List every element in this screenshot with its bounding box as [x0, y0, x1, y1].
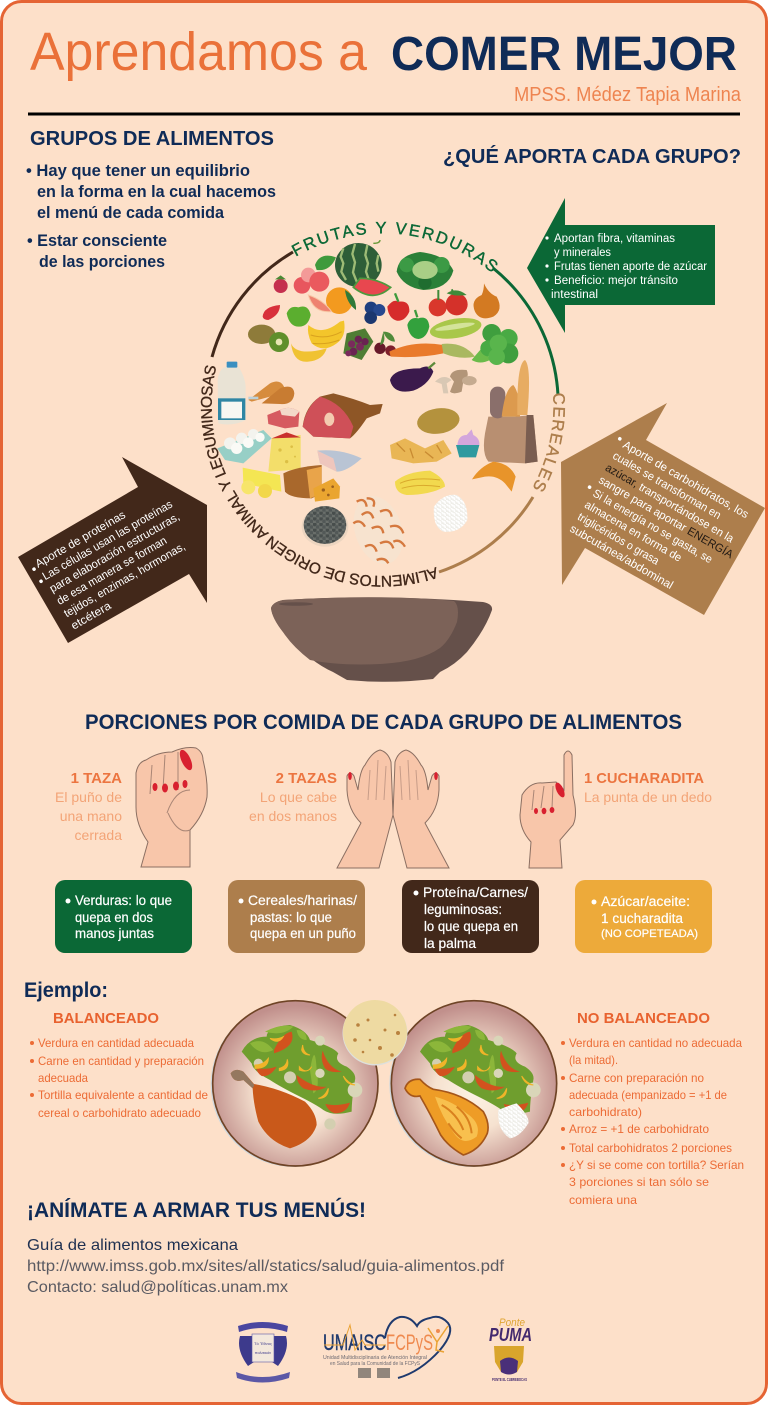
balanced list: Tortilla equivalente a cantidad de	[38, 1088, 208, 1102]
heading: qué aporta cada grupo: ¿QUÉ APORTA CADA GRUPO?	[443, 145, 741, 168]
text block: recommendations	[26, 162, 276, 271]
portion: 1 cucharadita: 1 CUCHARADITA	[584, 770, 704, 787]
heading: ejemplo: Ejemplo:	[24, 979, 108, 1002]
not balanced list: Verdura en cantidad no adecuada	[569, 1036, 742, 1050]
logo: UMAISC FCPyS: FCPyS	[386, 1330, 433, 1355]
tortilla	[342, 1000, 408, 1066]
arrow: proteínas info: Aporte de proteínas	[34, 509, 128, 571]
card: verduras: Verduras: lo que	[75, 893, 172, 908]
not balanced list	[561, 1010, 744, 1207]
card: verduras: quepa en dos	[75, 910, 153, 925]
card: verduras: manos juntas	[75, 926, 154, 941]
arrow: cereales info: Si la energía no se gasta, se	[590, 488, 714, 566]
arrow: proteínas info: para elaboración estructuras,	[48, 511, 182, 595]
contact and guide text	[27, 1237, 505, 1296]
text block: recommendations: en la forma en la cual hacemos	[37, 183, 276, 201]
logo: Ponte Puma: PONTE EL CUBREBOCAS	[492, 1377, 527, 1382]
portion: 1 taza: 1 TAZA	[71, 770, 122, 787]
arrow: frutas y verduras info: y minerales	[554, 247, 611, 259]
logo: Ponte Puma: Ponte	[499, 1317, 525, 1329]
title	[30, 22, 737, 82]
portion: 2 tazas: en dos manos	[249, 808, 337, 824]
portion: 1 taza: El puño de	[55, 789, 122, 805]
balanced list: cereal o carbohidrato adecuado	[38, 1106, 201, 1120]
text block: recommendations: • Hay que tener un equilibrio	[26, 162, 250, 180]
not balanced list: Arroz = +1 de carbohidrato	[569, 1122, 709, 1136]
arrow: frutas y verduras info: Beneficio: mejor tránsito	[554, 275, 678, 287]
logo: UMAISC FCPyS: Unidad Multidisciplinaria de Atención Integral	[323, 1355, 427, 1361]
not balanced list: adecuada (empanizado = +1 de	[569, 1088, 727, 1102]
icon: two open hands	[337, 750, 449, 868]
food illustrations	[217, 240, 538, 570]
not balanced list: comiera una	[569, 1193, 637, 1207]
bowl	[271, 597, 492, 682]
portion: 1 cucharadita	[584, 770, 712, 805]
title: Aprendamos a	[30, 22, 368, 82]
arrow: cereales info: sangre para aportar ENERGÍA	[596, 473, 736, 561]
arrow: frutas y verduras info: Frutas tienen aporte de azúcar	[554, 261, 707, 273]
heading: grupos de alimentos: GRUPOS DE ALIMENTOS	[30, 127, 274, 150]
arrow: cereales info: Aporte de carbohidratos, los	[620, 439, 751, 521]
balanced list	[30, 1010, 208, 1120]
portion: 2 tazas: 2 TAZAS	[276, 770, 337, 787]
not balanced list: (la mitad).	[569, 1053, 618, 1067]
logo: Ponte Puma	[489, 1317, 532, 1382]
arrow: frutas y verduras info: intestinal	[551, 289, 598, 301]
logo: UNAM crest	[236, 1322, 290, 1382]
card: cereales: Cereales/harinas/	[248, 893, 357, 908]
arrow: proteínas info: etcétera	[69, 600, 114, 633]
card: azúcar	[575, 880, 712, 953]
contact and guide text: http://www.imss.gob.mx/sites/all/statics/salud/guia-alimentos.pdf	[27, 1258, 505, 1275]
logo: UNAM crest: πολιτικόν	[255, 1350, 271, 1355]
card: proteína: lo que quepa en	[424, 919, 518, 934]
portion: 1 taza	[55, 770, 122, 843]
text block: recommendations: de las porciones	[39, 253, 165, 271]
card: proteína: la palma	[424, 936, 476, 951]
card: proteína: leguminosas:	[424, 902, 502, 917]
not balanced list: ¿Y si se come con tortilla? Serían	[569, 1158, 744, 1172]
card: azúcar: (NO COPETEADA)	[601, 928, 698, 940]
balanced list: Carne en cantidad y preparación	[38, 1054, 204, 1068]
card: azúcar: 1 cucharadita	[601, 911, 683, 926]
arrow: cereales info: triglicéridos o grasa	[575, 511, 661, 568]
arrow: cereales info: subcutánea/abdominal	[568, 523, 675, 592]
card: cereales	[228, 880, 365, 953]
card: cereales: pastas: lo que	[250, 910, 332, 925]
card: proteína	[402, 880, 539, 953]
portion: 2 tazas	[249, 770, 337, 824]
arrow: cereales info	[561, 403, 765, 615]
portion: 1 taza: cerrada	[75, 827, 122, 843]
not balanced list: carbohidrato)	[569, 1105, 642, 1119]
contact and guide text: Contacto: salud@políticas.unam.mx	[27, 1279, 288, 1296]
plate ring: arcs and group labels: CEREALES	[534, 393, 566, 492]
arrow: proteínas info: tejidos, enzimas, hormonas,	[62, 541, 188, 620]
arrow: cereales info: almacena en forma de	[582, 499, 683, 564]
logo: UMAISC FCPyS: en Salud para la Comunidad de la FCPyS	[330, 1361, 421, 1367]
food: animal origin and legumes	[217, 362, 411, 570]
plate ring: arcs and group labels	[200, 222, 566, 587]
card: azúcar: Azúcar/aceite:	[601, 894, 690, 909]
food: cereals	[390, 360, 538, 532]
text block: recommendations: el menú de cada comida	[37, 204, 225, 222]
portion: 2 tazas: Lo que cabe	[260, 789, 337, 805]
text block: recommendations: • Estar consciente	[27, 232, 167, 250]
card: proteína: Proteína/Carnes/	[423, 885, 528, 900]
logo: UMAISC FCPyS: UMAISC	[323, 1330, 386, 1355]
plate ring: arcs and group labels: FRUTAS Y VERDURAS	[291, 222, 498, 272]
balanced list: Verdura en cantidad adecuada	[38, 1036, 194, 1050]
heading: anímate: ¡ANÍMATE A ARMAR TUS MENÚS!	[27, 1198, 366, 1222]
contact and guide text: Guía de alimentos mexicana	[27, 1237, 238, 1254]
plate: not balanced	[389, 1001, 557, 1167]
plate: balanced	[211, 1001, 378, 1167]
plate ring: arcs and group labels: ALIMENTOS DE ORIGEN ANIMAL Y LEGUMINOSAS	[200, 365, 436, 587]
title: COMER MEJOR	[391, 28, 737, 81]
arrow: proteínas info	[18, 457, 207, 643]
card: verduras	[55, 880, 192, 953]
arrow: frutas y verduras info	[527, 198, 715, 333]
portion: 1 taza: una mano	[60, 808, 122, 824]
heading: porciones: PORCIONES POR COMIDA DE CADA GRUPO DE ALIMENTOS	[85, 711, 682, 734]
not balanced list: Carne con preparación no	[569, 1071, 704, 1085]
not balanced list: Total carbohidratos 2 porciones	[569, 1141, 732, 1155]
arrow: cereales info: cuales se transforman en	[610, 450, 723, 522]
logo: UNAM crest: Τὸ Ἔθνος	[254, 1341, 272, 1346]
author line: MPSS. Médez Tapia Marina	[514, 84, 742, 106]
arrow: frutas y verduras info: Aportan fibra, vitaminas	[554, 233, 675, 245]
logo: UMAISC FCPyS	[323, 1317, 450, 1378]
icon: closed fist	[136, 748, 207, 867]
not balanced list: 3 porciones si tan sólo se	[569, 1175, 709, 1189]
balanced list: BALANCEADO	[53, 1010, 159, 1027]
not balanced list: NO BALANCEADO	[577, 1010, 710, 1027]
food: fruits and vegetables	[248, 240, 518, 393]
arrow: cereales info: azúcar, transportándose en la	[603, 462, 736, 546]
balanced list: adecuada	[38, 1071, 88, 1085]
arrow: proteínas info: Las células usan las proteínas	[41, 498, 175, 583]
icon: fingertip hand	[520, 751, 576, 868]
logo: Ponte Puma: PUMA	[489, 1325, 532, 1345]
portion: 1 cucharadita: La punta de un dedo	[584, 789, 712, 805]
card: cereales: quepa en un puño	[250, 926, 356, 941]
arrow: proteínas info: de esa manera se forman	[55, 535, 169, 608]
